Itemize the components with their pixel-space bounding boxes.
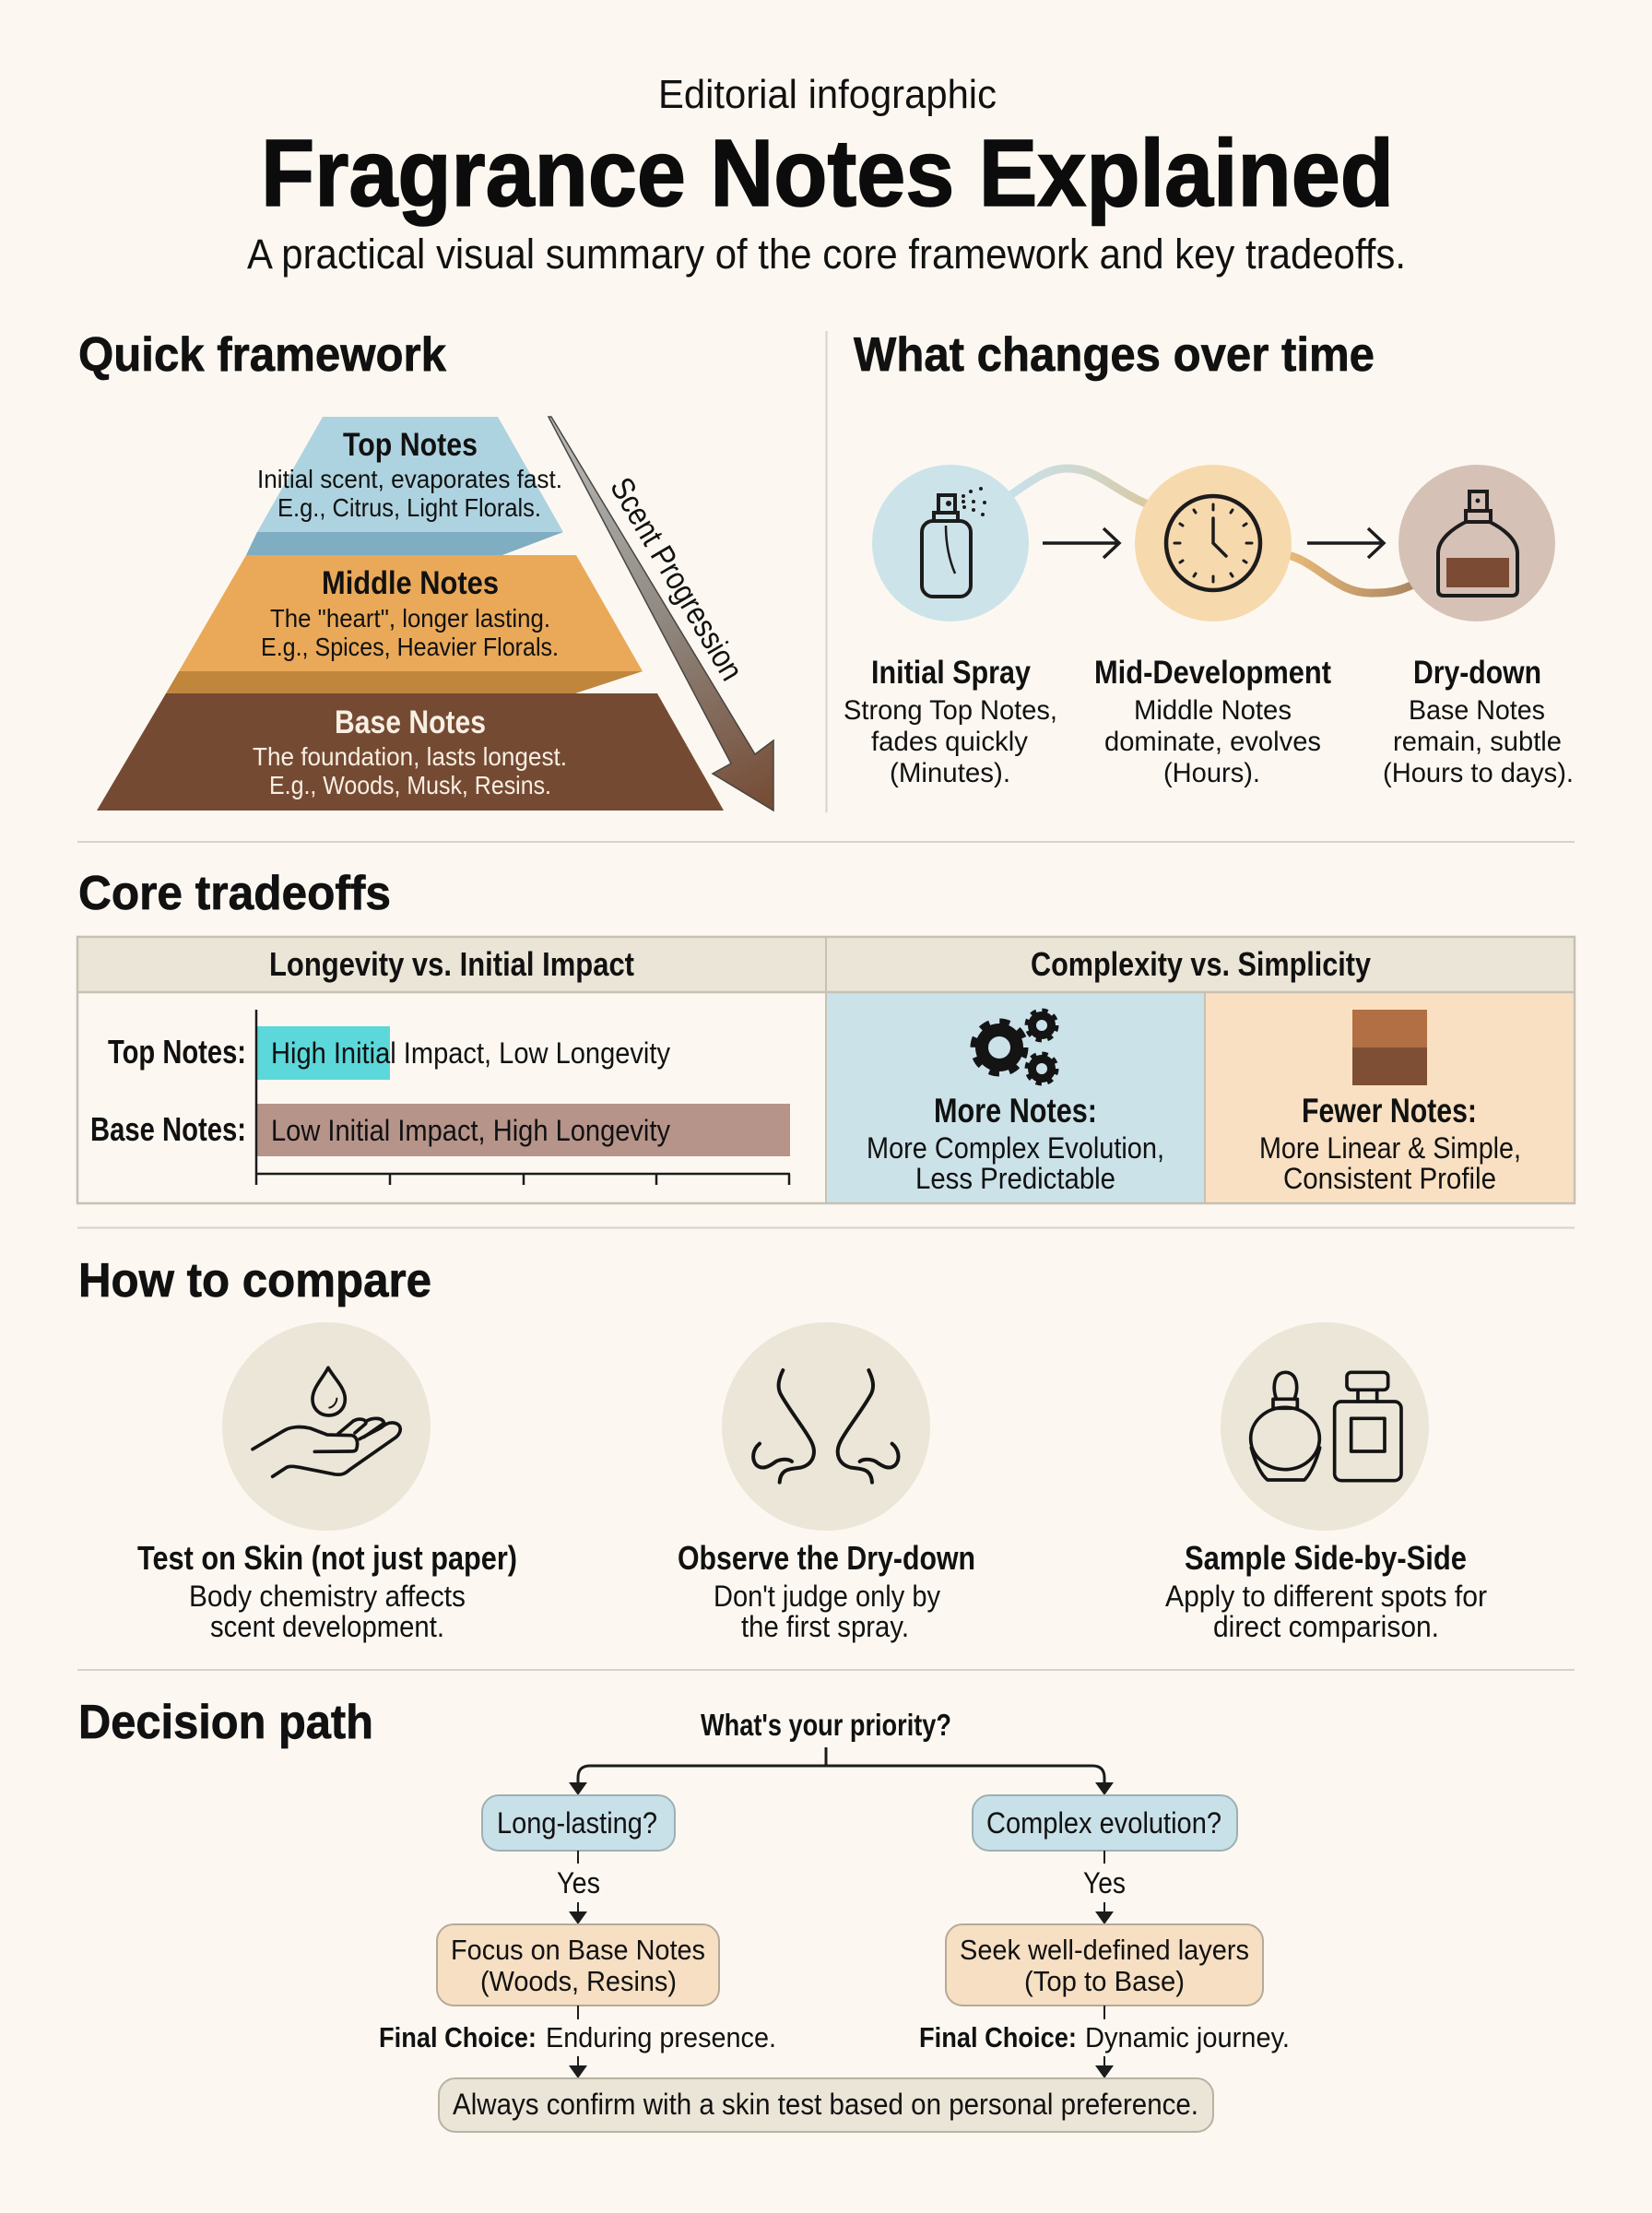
header [247,72,1406,278]
icon: spray bottle [872,465,1029,621]
node: seek well-defined layers: Seek well-defined layers [960,1934,1249,1966]
connector: left yes: Yes [557,1866,600,1899]
pyramid tier: top notes: Top Notes [343,427,478,463]
step: dry-down: Base Notes [1409,695,1545,726]
connector: left final choice: Final Choice: [379,2021,537,2053]
node: seek well-defined layers: (Top to Base) [1024,1965,1185,1997]
step: initial spray: (Minutes). [890,758,1010,788]
bar chart: longevity vs impact [90,1010,790,1185]
bar chart: longevity vs impact: Top Notes: [108,1033,246,1071]
step: mid-development: (Hours). [1163,758,1260,788]
node: focus on base notes [437,1924,719,2006]
heading: what changes over time: What changes over time [854,328,1375,382]
icon: two perfume bottles [1221,1322,1429,1531]
node: final advice [439,2078,1213,2132]
cell: more notes: More Complex Evolution, [867,1131,1164,1165]
panel: core tradeoffs [77,867,1575,1203]
heading: core tradeoffs: Core tradeoffs [78,867,391,920]
tradeoffs table [77,937,1575,1203]
cell: fewer notes: Fewer Notes: [1302,1092,1477,1130]
step: dry-down: Dry-down [1413,655,1541,691]
pyramid tier: base notes: The foundation, lasts longest. [253,742,567,771]
panel: how to compare [78,1254,1487,1643]
node: long-lasting [482,1795,675,1851]
step: dry-down [1383,655,1574,788]
icon: dry-down bottle [1398,465,1555,621]
cell: more notes [867,1011,1164,1195]
step: initial spray: fades quickly [871,727,1028,757]
step: initial spray: Initial Spray [871,655,1031,691]
icon: hand with drop [222,1322,431,1531]
bar chart: longevity vs impact: High Initial Impact, Low Longevity [271,1036,670,1070]
node: seek well-defined layers [946,1924,1263,2006]
pyramid tier: middle notes [166,555,643,693]
node: focus on base notes: Focus on Base Notes [451,1934,705,1966]
panel: quick framework [78,328,773,811]
tip: observe the dry-down: the first spray. [741,1610,909,1643]
arrow: scent progression [549,417,773,811]
cell: fewer notes [1259,1010,1521,1195]
arrow: scent progression: Scent Progression [603,471,750,687]
icon: gears [974,1011,1056,1083]
step: mid-development [1094,655,1331,788]
pyramid tier: base notes: E.g., Woods, Musk, Resins. [269,771,551,799]
tip: sample side-by-side: Apply to different spots for [1165,1580,1487,1613]
connector: right yes: Yes [1083,1866,1126,1899]
pyramid tier: base notes: Base Notes [335,704,486,740]
cell: fewer notes: Consistent Profile [1283,1162,1496,1195]
table header: complexity vs simplicity: Complexity vs. Simplicity [1031,945,1371,983]
tip: sample side-by-side [1165,1539,1487,1643]
cell: fewer notes: More Linear & Simple, [1259,1131,1521,1165]
pyramid tier: base notes [97,693,724,811]
tip: test on skin: Test on Skin (not just paper) [137,1539,517,1577]
node: focus on base notes: (Woods, Resins) [480,1965,677,1997]
connector: right yes [1083,1851,1126,1924]
flowchart [379,1708,1290,2132]
step: dry-down: remain, subtle [1393,727,1562,757]
icon: nose [722,1322,930,1531]
connector: right final choice [919,2006,1290,2078]
icon: layered block [1352,1010,1427,1085]
tip: sample side-by-side: Sample Side-by-Side [1185,1539,1467,1577]
step: initial spray: Strong Top Notes, [844,695,1057,726]
eyebrow: Editorial infographic [658,72,997,117]
tip: test on skin [137,1539,517,1643]
divider between top panels [826,331,828,812]
bar chart: longevity vs impact: Low Initial Impact, High Longevity [271,1114,670,1147]
connector: right final choice: Final Choice: [919,2021,1077,2053]
tip: observe the dry-down: Don't judge only by [714,1580,940,1613]
step: mid-development: Middle Notes [1134,695,1292,726]
pyramid tier: middle notes: The "heart", longer lasting. [270,604,550,633]
node: complex evolution [973,1795,1237,1851]
connector: right final choice: Dynamic journey. [1085,2021,1290,2053]
flow question: What's your priority? [701,1708,951,1742]
node: final advice: Always confirm with a skin test based on personal preference. [453,2088,1198,2121]
arrow: mid to dry-down [1307,528,1384,558]
heading: decision path: Decision path [78,1696,373,1749]
table header: longevity vs initial impact: Longevity vs. Initial Impact [269,945,634,983]
pyramid tier: middle notes: Middle Notes [322,565,499,601]
pyramid tier: middle notes: E.g., Spices, Heavier Florals. [261,633,559,661]
panel: decision path [78,1696,1290,2132]
pyramid tier: top notes [246,417,563,555]
connector: left final choice [379,2006,776,2078]
timeline ribbon: mid to dry-down [1288,555,1415,593]
heading: how to compare: How to compare [78,1254,431,1308]
pyramid tier: top notes: Initial scent, evaporates fast. [257,465,562,493]
cell: more notes: More Notes: [934,1092,1097,1130]
branch connector [569,1747,1114,1795]
tip: test on skin: Body chemistry affects [189,1580,466,1613]
cell: more notes: Less Predictable [915,1162,1115,1195]
connector: left yes [557,1851,600,1924]
icon: clock [1135,465,1292,621]
panel: what changes over time [844,328,1574,788]
node: long-lasting: Long-lasting? [497,1806,657,1840]
pyramid tier: top notes: E.g., Citrus, Light Florals. [277,493,541,522]
tip: test on skin: scent development. [210,1610,444,1643]
step: mid-development: Mid-Development [1094,655,1331,691]
connector: left final choice: Enduring presence. [546,2021,776,2053]
node: complex evolution: Complex evolution? [986,1806,1221,1840]
tip: observe the dry-down: Observe the Dry-down [678,1539,975,1577]
tip: observe the dry-down [678,1539,975,1643]
timeline ribbon: spray to mid [1010,468,1148,504]
bar chart: longevity vs impact: Base Notes: [90,1110,246,1148]
tip: sample side-by-side: direct comparison. [1213,1610,1439,1643]
title: Fragrance Notes Explained [261,120,1394,226]
pyramid [97,417,724,811]
step: dry-down: (Hours to days). [1383,758,1574,788]
step: mid-development: dominate, evolves [1104,727,1321,757]
heading: quick framework: Quick framework [78,328,446,382]
step: initial spray [844,655,1057,788]
subtitle: A practical visual summary of the core framework and key tradeoffs. [247,231,1406,278]
arrow: spray to mid [1043,528,1119,558]
